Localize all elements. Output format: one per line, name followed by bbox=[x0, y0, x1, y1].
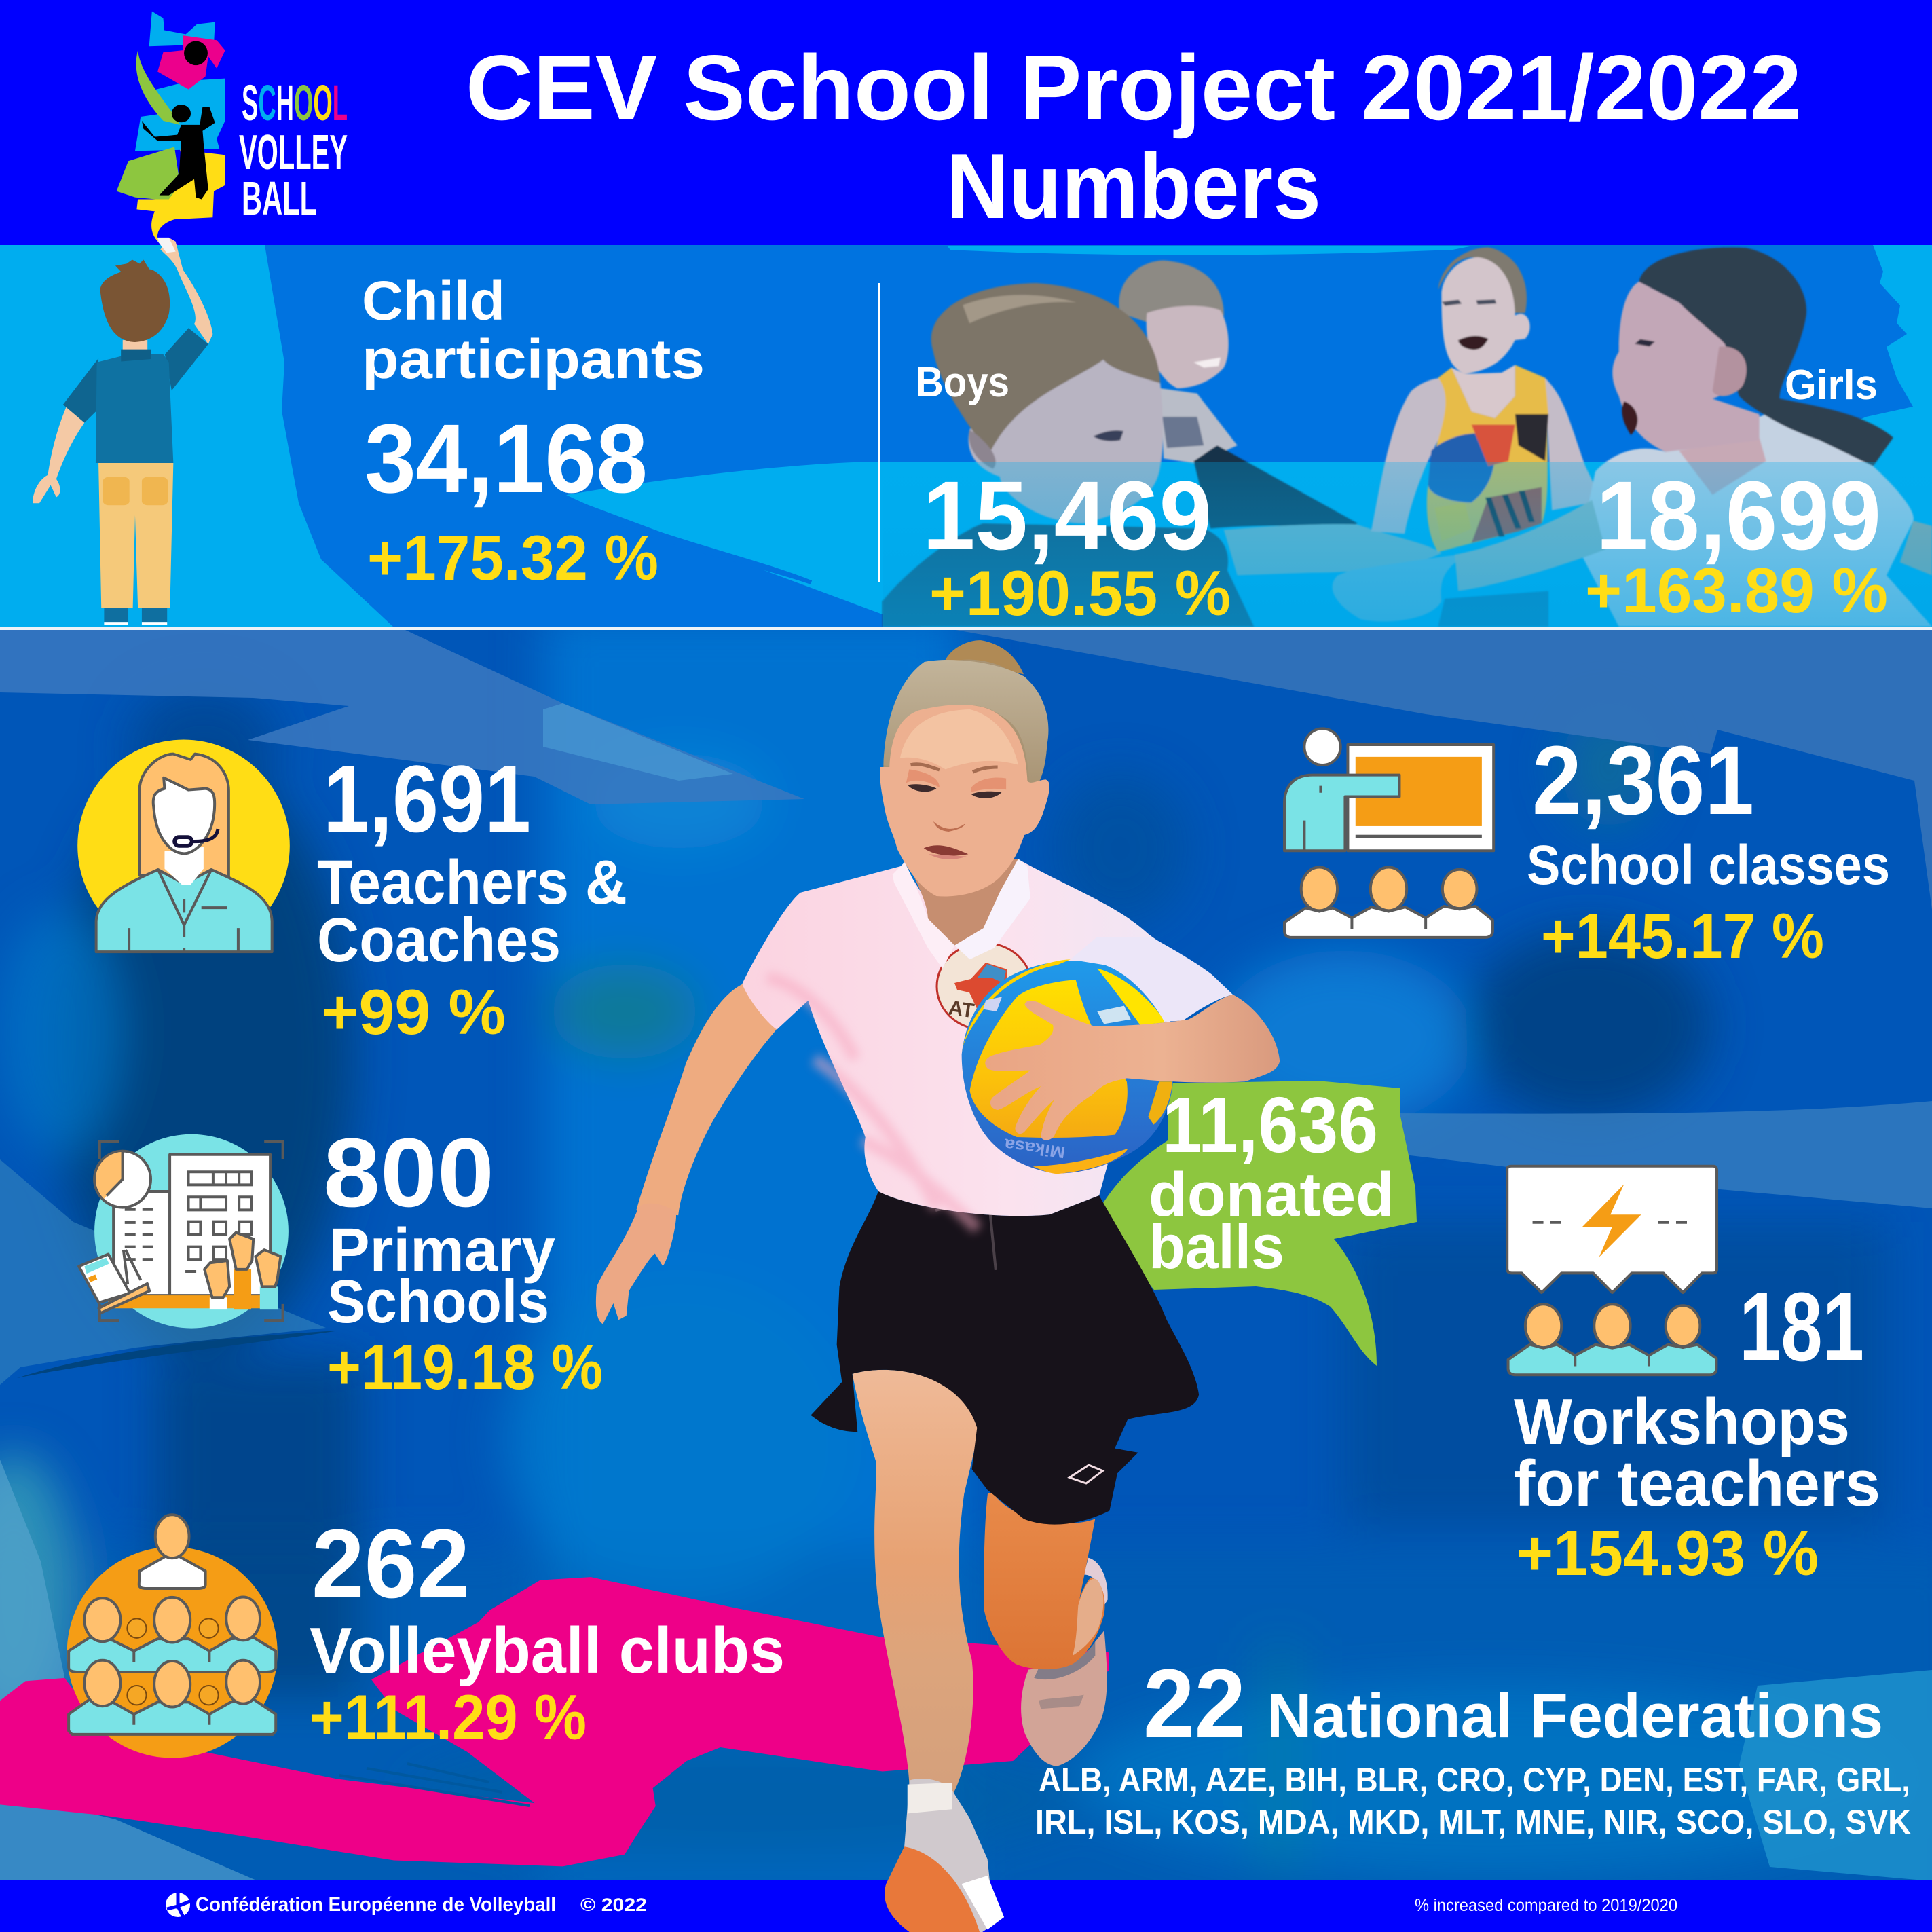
footer: copyright: © 2022 bbox=[580, 1895, 647, 1915]
kids photo illustration bbox=[883, 248, 1932, 627]
girl: volleyball bbox=[962, 959, 1173, 1174]
stat: donated balls: donated bbox=[1149, 1160, 1394, 1229]
girl: head bbox=[880, 640, 1049, 896]
icon: school building bbox=[79, 1134, 289, 1329]
stat: volleyball clubs bbox=[310, 1509, 785, 1753]
stat: workshops for teachers: Workshops bbox=[1514, 1386, 1850, 1458]
top band: light streak at top bbox=[947, 246, 1473, 255]
stat: girls: 18,699 bbox=[1596, 461, 1881, 570]
stat: workshops for teachers: for teachers bbox=[1514, 1447, 1880, 1520]
stat: primary schools: +119.18 % bbox=[327, 1331, 603, 1402]
icon: volleyball club bbox=[67, 1515, 278, 1758]
stat: national federations bbox=[1035, 1649, 1911, 1841]
stat: school classes: School classes bbox=[1527, 834, 1890, 896]
vertical divider bbox=[878, 283, 880, 582]
header bar bbox=[0, 0, 1932, 245]
stat: child participants: Child bbox=[362, 270, 505, 332]
icon: teacher with headset bbox=[77, 740, 290, 952]
stat: teachers and coaches bbox=[317, 745, 627, 1047]
running girl with volleyball bbox=[596, 640, 1280, 1932]
girl: front leg bbox=[853, 1370, 980, 1793]
stat: boys: 15,469 bbox=[923, 461, 1212, 570]
stat: primary schools: 800 bbox=[323, 1118, 494, 1227]
stat: boys: Boys bbox=[916, 359, 1009, 406]
stat: teachers and coaches: Teachers & bbox=[317, 848, 627, 917]
girl: badge bbox=[937, 943, 1032, 1030]
stat: donated balls: balls bbox=[1149, 1212, 1284, 1282]
stat: girls: Girls bbox=[1785, 362, 1878, 409]
stat: primary schools: Schools bbox=[327, 1268, 549, 1336]
title: CEV School Project 2021/2022 bbox=[466, 36, 1802, 139]
stat: national federations: National Federations bbox=[1267, 1682, 1883, 1751]
logo: text: BALL bbox=[242, 172, 317, 225]
stat: child participants: 34,168 bbox=[365, 404, 648, 513]
photo: girl centre bbox=[1371, 248, 1595, 627]
stat: boys bbox=[916, 359, 1231, 629]
stat: primary schools: Primary bbox=[329, 1216, 555, 1284]
stat: workshops for teachers: 181 bbox=[1739, 1272, 1864, 1381]
girl: back leg and shoe bbox=[984, 1493, 1108, 1766]
horizontal white separator bbox=[0, 627, 1932, 630]
girl: right sleeve bbox=[1071, 937, 1233, 1022]
stat: donated balls: 11,636 bbox=[1162, 1081, 1378, 1169]
top band: dark streak in light area bbox=[563, 496, 811, 582]
photo: girl right bbox=[1455, 248, 1932, 627]
stat: child participants: +175.32 % bbox=[367, 522, 658, 593]
photo: boy arm and hands bbox=[1224, 524, 1468, 621]
title bbox=[466, 36, 1802, 238]
logo: text: SCHOOL bbox=[242, 75, 348, 131]
stat: workshops for teachers bbox=[1514, 1272, 1880, 1589]
photo: light blue tint over lower part bbox=[883, 462, 1932, 627]
logo: text: VOLLEY bbox=[239, 126, 348, 180]
title: Numbers bbox=[946, 134, 1321, 238]
pink brush stroke bbox=[0, 1577, 1109, 1866]
stat: volleyball clubs: 262 bbox=[312, 1509, 470, 1618]
logo: text bbox=[239, 75, 348, 225]
lower background panel bbox=[0, 611, 1932, 1932]
stat: child participants bbox=[362, 270, 705, 593]
stat: teachers and coaches: +99 % bbox=[321, 976, 506, 1047]
stat: girls: +163.89 % bbox=[1585, 555, 1888, 626]
top band: light blue base bbox=[0, 245, 1932, 627]
girl: badge: ATA bbox=[947, 997, 988, 1024]
boy drawing illustration bbox=[33, 238, 212, 625]
stat: school classes bbox=[1527, 726, 1890, 971]
stat: school classes: 2,361 bbox=[1532, 726, 1754, 835]
stat: national federations: 22 bbox=[1143, 1649, 1246, 1758]
footer: organisation name: Confédération Européenne de Volleyball bbox=[196, 1894, 556, 1916]
girl: left arm and hand bbox=[596, 984, 777, 1324]
footer bar bbox=[0, 1880, 1932, 1932]
footer: CEV emblem bbox=[166, 1893, 191, 1917]
stat: school classes: +145.17 % bbox=[1541, 900, 1824, 971]
stat: donated balls bbox=[1149, 1081, 1394, 1282]
girl: t-shirt bbox=[742, 859, 1229, 1216]
stat: child participants: participants bbox=[362, 329, 705, 390]
top band: dark blue brush shape bbox=[265, 245, 1913, 627]
stat: girls bbox=[1585, 362, 1888, 626]
girl: t-shirt soft pink folds bbox=[767, 978, 978, 1229]
girl: arm and hand on ball bbox=[985, 995, 1280, 1140]
footer: note: % increased compared to 2019/2020 bbox=[1415, 1896, 1677, 1915]
stat: boys: +190.55 % bbox=[929, 557, 1231, 629]
photo: boy front bbox=[883, 283, 1254, 627]
logo: School Volley Ball bbox=[117, 12, 348, 242]
girl: neck and collar bbox=[893, 859, 1030, 969]
stat: volleyball clubs: +111.29 % bbox=[310, 1682, 587, 1753]
photo: boy behind bbox=[1119, 261, 1358, 530]
stat: volleyball clubs: Volleyball clubs bbox=[310, 1614, 785, 1687]
icon: workshop bbox=[1507, 1166, 1717, 1375]
stat: teachers and coaches: Coaches bbox=[317, 906, 561, 975]
green brush callout shape bbox=[1100, 1081, 1417, 1366]
girl: front shoe bbox=[885, 1779, 1004, 1932]
girl: ball brand text: Mikasa bbox=[1003, 1134, 1066, 1162]
stat: teachers and coaches: 1,691 bbox=[323, 745, 531, 852]
stat: primary schools bbox=[323, 1118, 603, 1402]
girl: shorts bbox=[811, 1191, 1199, 1525]
logo: brush artwork and jumper bbox=[117, 12, 225, 242]
icon: classroom bbox=[1284, 728, 1493, 937]
stat: workshops for teachers: +154.93 % bbox=[1517, 1517, 1819, 1589]
